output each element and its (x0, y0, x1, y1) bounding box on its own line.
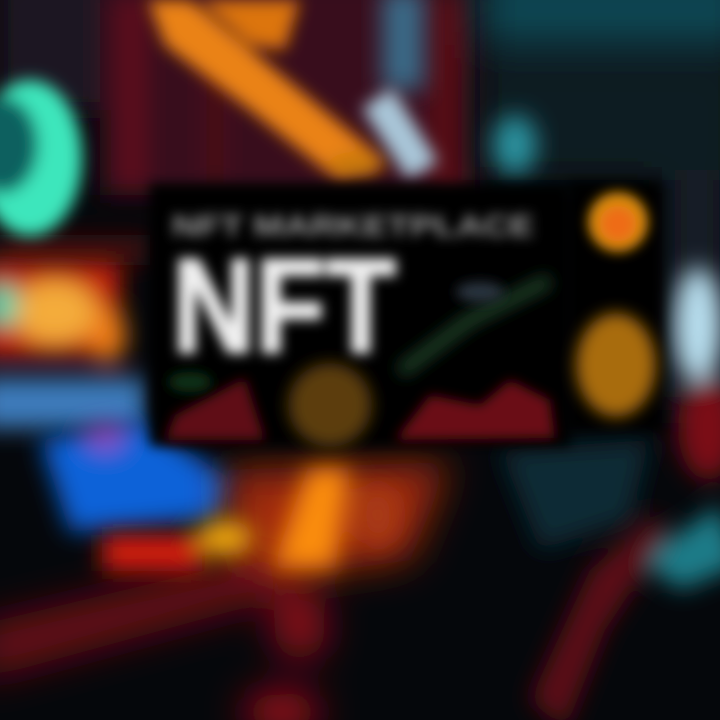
orange glow and red bar (102, 468, 398, 571)
icon: teal blob (493, 115, 537, 175)
icon: gold coin (576, 313, 656, 417)
panel: right coin strip (568, 180, 663, 430)
icon: mint ring (0, 80, 82, 236)
background: red wall (0, 0, 475, 265)
right side accents (500, 267, 720, 720)
icon: light blue streak (382, 0, 424, 90)
chart: left red mountain (165, 378, 265, 440)
icon: orange diagonal stripe (148, 0, 388, 182)
bottom red and orange table (0, 462, 450, 720)
icon: centre gold coin (288, 363, 372, 447)
chart: right red mountain (395, 380, 555, 440)
title: NFT: NFT (172, 232, 396, 381)
chart: green hint (168, 372, 212, 392)
chart: grey smudge (456, 282, 504, 302)
left stack of colourful patches (0, 262, 145, 428)
icon: pale blue highlight (362, 88, 438, 180)
chart: green trend line (400, 280, 550, 372)
blue block (40, 420, 232, 532)
panel: black card (150, 180, 663, 447)
heading: blurred title line: NFT MARKETPLACE (172, 210, 534, 243)
background: teal wall (480, 0, 720, 410)
icon: orange coin (588, 192, 648, 252)
